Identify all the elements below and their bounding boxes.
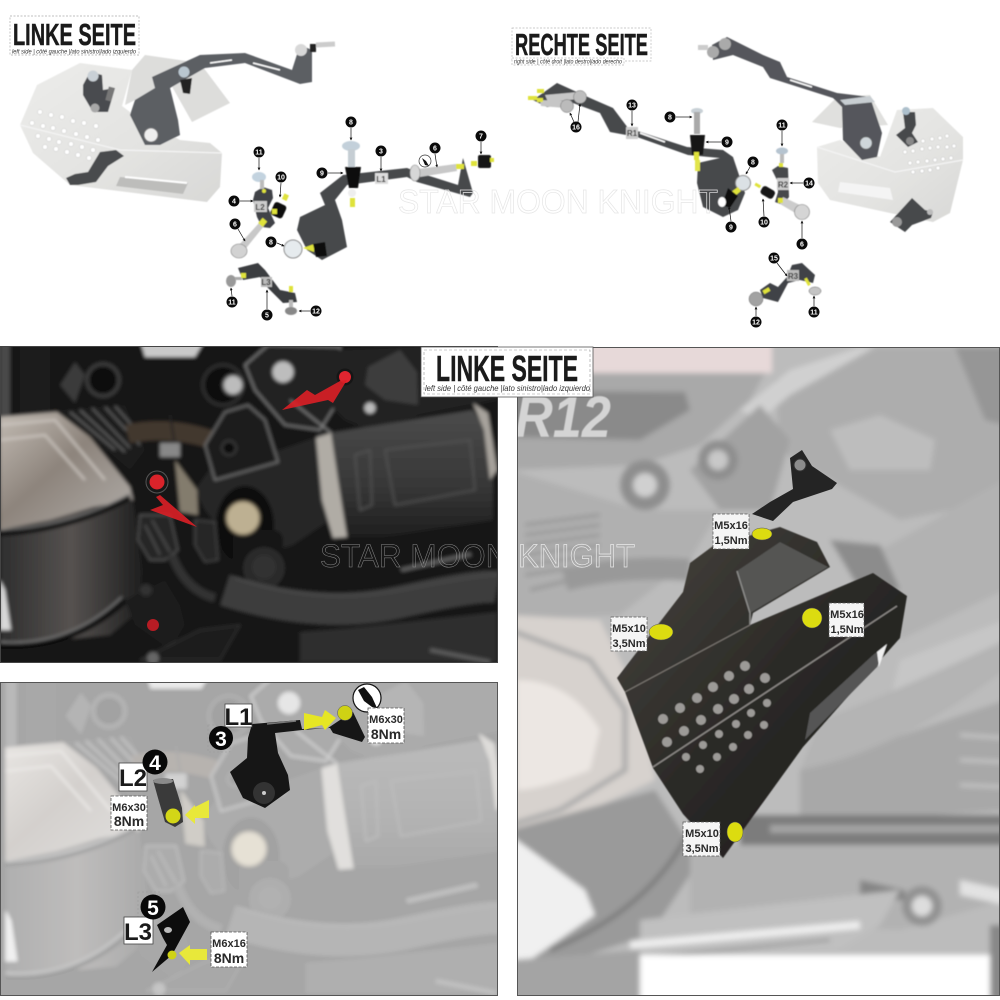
exploded part L2 bracket bbox=[231, 172, 289, 258]
callout numbers, left diagram: 4 bbox=[232, 198, 236, 206]
callout numbers, right diagram: 10 bbox=[760, 220, 768, 226]
spec label M6x30 8Nm right bbox=[368, 708, 404, 743]
heat guard, hump and main plate bbox=[617, 527, 907, 858]
upper strap bracket bbox=[752, 450, 837, 521]
emblem text: R12 bbox=[515, 385, 611, 450]
spec label M5x10 3,5Nm bottom bbox=[683, 822, 720, 856]
panel: right photo with heat guard fitted bbox=[510, 340, 1000, 1000]
callout numbers, left diagram: 10 bbox=[277, 174, 285, 182]
exploded part R2 bracket bbox=[754, 148, 810, 220]
bracket L1 bbox=[230, 712, 365, 808]
callout numbers, right diagram: 16 bbox=[572, 124, 580, 132]
bracket L2 bbox=[153, 778, 183, 827]
spec label M5x10 3,5Nm bottom: 3,5Nm bbox=[685, 843, 719, 855]
spec label M5x10 3,5Nm left: M5x10 bbox=[612, 623, 646, 635]
marker 4 with L2 tag: L2 bbox=[119, 765, 147, 792]
arrow: yellow to L1 bolt bbox=[304, 710, 336, 730]
yellow bolts bbox=[649, 528, 822, 842]
spec label M5x16 1,5Nm top: M5x16 bbox=[714, 520, 748, 532]
arrow: yellow to L2 bolt bbox=[185, 800, 209, 824]
arrow: yellow to L3 bolt bbox=[179, 945, 207, 965]
marker 5 with L3 tag: 5 bbox=[147, 897, 159, 920]
heading: rechte seite: right side | côté droit |lato destro|lado derecho bbox=[514, 60, 623, 66]
red arrows bbox=[150, 380, 347, 527]
panel: left side exploded diagram bbox=[10, 16, 494, 320]
watermark, photo: STAR MOON KNIGHT bbox=[320, 538, 636, 574]
heading: linke seite over photos: LINKE SEITE bbox=[436, 348, 578, 389]
callout numbers, right diagram: 12 bbox=[752, 320, 760, 326]
marker 3 with L1 tag: 3 bbox=[215, 728, 227, 751]
callout numbers, left diagram bbox=[226, 116, 486, 320]
exploded part R2 bracket: R2 bbox=[778, 180, 789, 190]
callout numbers, right diagram: 11 bbox=[810, 310, 818, 316]
panel border bbox=[0, 346, 498, 662]
callout numbers, right diagram: 15 bbox=[770, 256, 778, 262]
spec label M6x30 8Nm left: 8Nm bbox=[114, 813, 144, 829]
callout numbers, right diagram: 6 bbox=[800, 242, 804, 248]
spec label M6x30 8Nm right: M6x30 bbox=[369, 714, 403, 726]
bracket L3 bbox=[152, 907, 190, 972]
spec label M6x30 8Nm left bbox=[111, 796, 147, 830]
panel: engine photo, mounting points bbox=[1, 347, 497, 662]
callout numbers, left diagram: 7 bbox=[479, 134, 483, 140]
spec label M6x30 8Nm right: 8Nm bbox=[371, 726, 401, 742]
callout numbers, left diagram: 11 bbox=[228, 300, 236, 306]
yellow bolt L1 bbox=[338, 706, 352, 720]
spec label M6x16 8Nm: M6x16 bbox=[212, 938, 246, 950]
washed background photo bbox=[510, 340, 1000, 1000]
heading: linke seite: LINKE SEITE bbox=[13, 17, 136, 52]
callout numbers, right diagram: 14 bbox=[805, 180, 813, 188]
callout numbers, right diagram bbox=[570, 100, 820, 328]
callout numbers, right diagram: 13 bbox=[628, 102, 636, 110]
heading: rechte seite bbox=[512, 27, 651, 66]
panel: engine photo with left brackets fitted bbox=[0, 682, 498, 996]
callout numbers, left diagram: 6 bbox=[433, 146, 437, 152]
exploded part R1 bracket bbox=[528, 83, 750, 217]
heading: linke seite bbox=[10, 16, 139, 56]
callout numbers, left diagram: 8 bbox=[349, 120, 353, 126]
callout numbers, left diagram: 3 bbox=[379, 148, 383, 156]
spec label M5x10 3,5Nm left bbox=[611, 617, 647, 651]
spec label M6x16 8Nm bbox=[211, 932, 247, 967]
callout numbers, left diagram: 9 bbox=[320, 170, 324, 178]
marker 3 with L1 tag bbox=[208, 704, 253, 752]
callout numbers, right diagram: 9 bbox=[729, 224, 733, 232]
spec label M5x16 1,5Nm right: M5x16 bbox=[830, 609, 864, 621]
marker 5 with L3 tag bbox=[124, 892, 166, 946]
spec label M5x16 1,5Nm right: 1,5Nm bbox=[830, 624, 864, 636]
callout numbers, left diagram: 8 bbox=[269, 240, 273, 246]
heading: rechte seite: RECHTE SEITE bbox=[515, 27, 648, 62]
exploded part L3 bracket bbox=[226, 263, 297, 315]
callout numbers, left diagram: 12 bbox=[312, 308, 320, 316]
spec label M5x16 1,5Nm top: 1,5Nm bbox=[714, 535, 748, 547]
watermark, top: STAR MOON KNIGHT bbox=[398, 183, 718, 220]
callout numbers, right diagram: 8 bbox=[668, 114, 672, 122]
callout numbers, right diagram: 9 bbox=[725, 140, 729, 146]
exploded part R1 bracket: R1 bbox=[627, 129, 638, 138]
heading: linke seite over photos: left side | côté gauche |lato sinistro|lado izquierdo bbox=[425, 384, 591, 393]
callout numbers, right diagram: 11 bbox=[778, 122, 786, 130]
callout numbers, right diagram: 8 bbox=[751, 160, 755, 166]
yellow bolt L2 bbox=[166, 808, 180, 824]
marker 4 with L2 tag bbox=[119, 750, 168, 792]
exploded part R3 bracket: R3 bbox=[788, 272, 799, 281]
watermark, right photo: KNIGHT bbox=[518, 538, 635, 574]
yellow bolt L3 bbox=[168, 950, 176, 960]
heading: linke seite: left side | côté gauche |lato sinistro|lado izquierdo bbox=[12, 50, 137, 56]
exploded part L3 bracket: L3 bbox=[261, 278, 271, 287]
spec label M5x16 1,5Nm top bbox=[713, 514, 749, 549]
panel: right side exploded diagram bbox=[512, 27, 963, 328]
exploded part L2 bracket: L2 bbox=[255, 203, 265, 212]
spec label M5x10 3,5Nm left: 3,5Nm bbox=[612, 638, 646, 650]
spec label M6x30 8Nm left: M6x30 bbox=[112, 802, 146, 814]
callout numbers, left diagram: 6 bbox=[233, 222, 237, 228]
red mounting bolts bbox=[146, 368, 354, 631]
exploded part R3 bracket bbox=[749, 263, 821, 306]
exploded part L1 bracket: L1 bbox=[376, 175, 386, 184]
spec label M6x16 8Nm: 8Nm bbox=[214, 950, 244, 966]
assembled silver guard, left bbox=[20, 41, 335, 202]
marker 3 with L1 tag: L1 bbox=[224, 704, 253, 731]
callout numbers, left diagram: 11 bbox=[255, 150, 263, 156]
assembled silver guard, right bbox=[698, 37, 963, 232]
exploded part L1 bracket bbox=[284, 141, 494, 260]
marker 5 with L3 tag: L3 bbox=[124, 919, 152, 946]
icon: thread lock tool bbox=[353, 684, 381, 712]
heading: linke seite over photos bbox=[421, 347, 593, 397]
spec label M5x16 1,5Nm right bbox=[829, 603, 864, 637]
spec label M5x10 3,5Nm bottom: M5x10 bbox=[685, 828, 719, 840]
marker 4 with L2 tag: 4 bbox=[149, 752, 161, 775]
callout numbers, left diagram: 5 bbox=[265, 312, 269, 320]
